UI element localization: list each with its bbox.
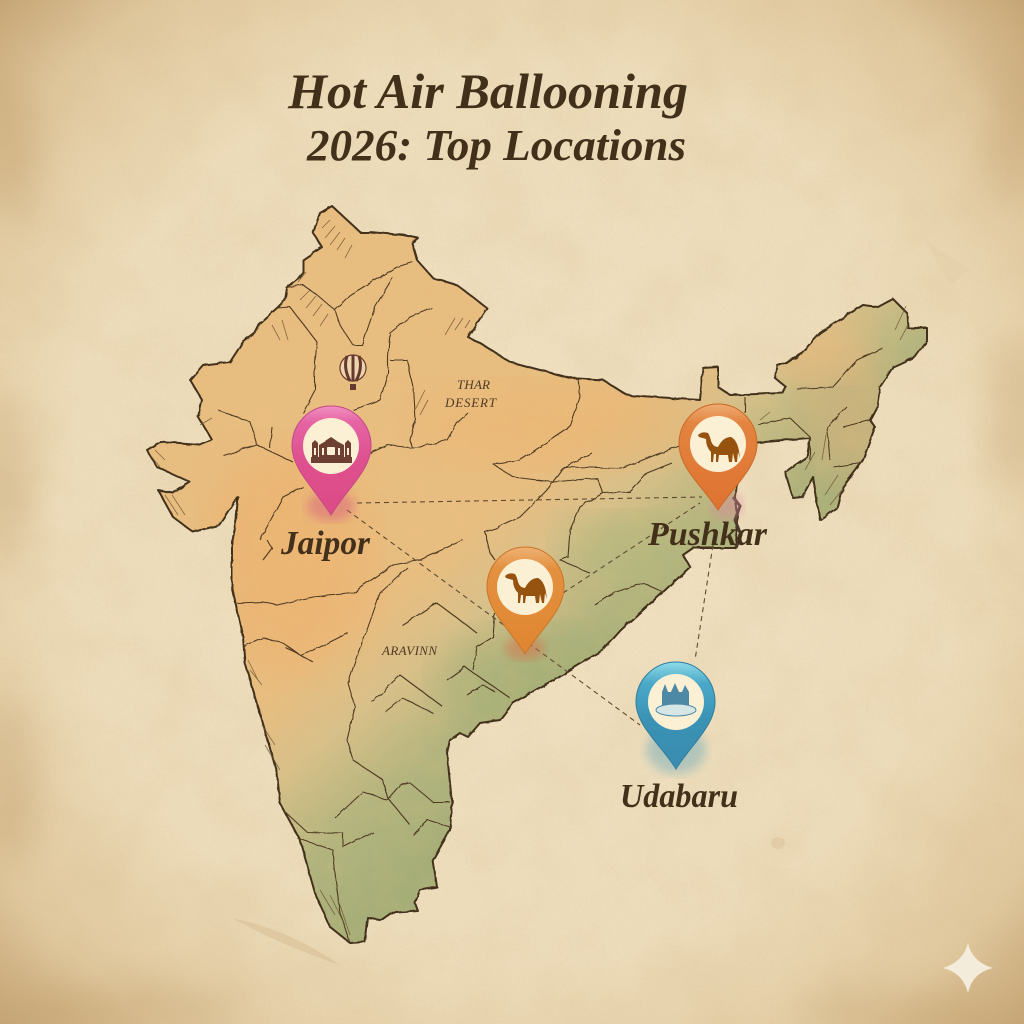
jagged coast beside Pushkar bbox=[733, 497, 741, 548]
icon: camel bbox=[505, 573, 547, 603]
rivers and terrain lines bbox=[218, 262, 883, 943]
label: Pushkar: Pushkar bbox=[647, 516, 768, 553]
map label: Thar Desert bbox=[444, 377, 497, 410]
paper stain marks bbox=[232, 240, 970, 965]
coastline bbox=[147, 206, 927, 943]
map label: Thar Desert: DESERT bbox=[444, 395, 497, 410]
map label: Aravinn: ARAVINN bbox=[381, 643, 438, 658]
icon: sparkle bbox=[943, 943, 993, 993]
icon: hot air balloon bbox=[340, 355, 366, 390]
label: Udabaru: Udabaru bbox=[620, 778, 738, 815]
label: Jaipor: Jaipor bbox=[280, 525, 371, 562]
pin: Udabaru bbox=[636, 662, 715, 774]
pin: Jaipur bbox=[292, 406, 371, 521]
pin: central camel location bbox=[487, 547, 564, 660]
icon: camel bbox=[698, 432, 740, 462]
palace windows bbox=[314, 447, 349, 455]
map label: Thar Desert: THAR bbox=[457, 377, 490, 392]
hatching bbox=[150, 220, 908, 935]
title: 2026: Top Locations bbox=[306, 121, 686, 170]
dashed route lines bbox=[347, 497, 713, 725]
title: Hot Air Ballooning bbox=[287, 63, 688, 119]
icon: water palace bbox=[656, 683, 696, 716]
icon: palace bbox=[311, 437, 352, 463]
map of India bbox=[146, 205, 928, 944]
pin: Pushkar bbox=[679, 404, 757, 519]
title bbox=[287, 63, 688, 170]
